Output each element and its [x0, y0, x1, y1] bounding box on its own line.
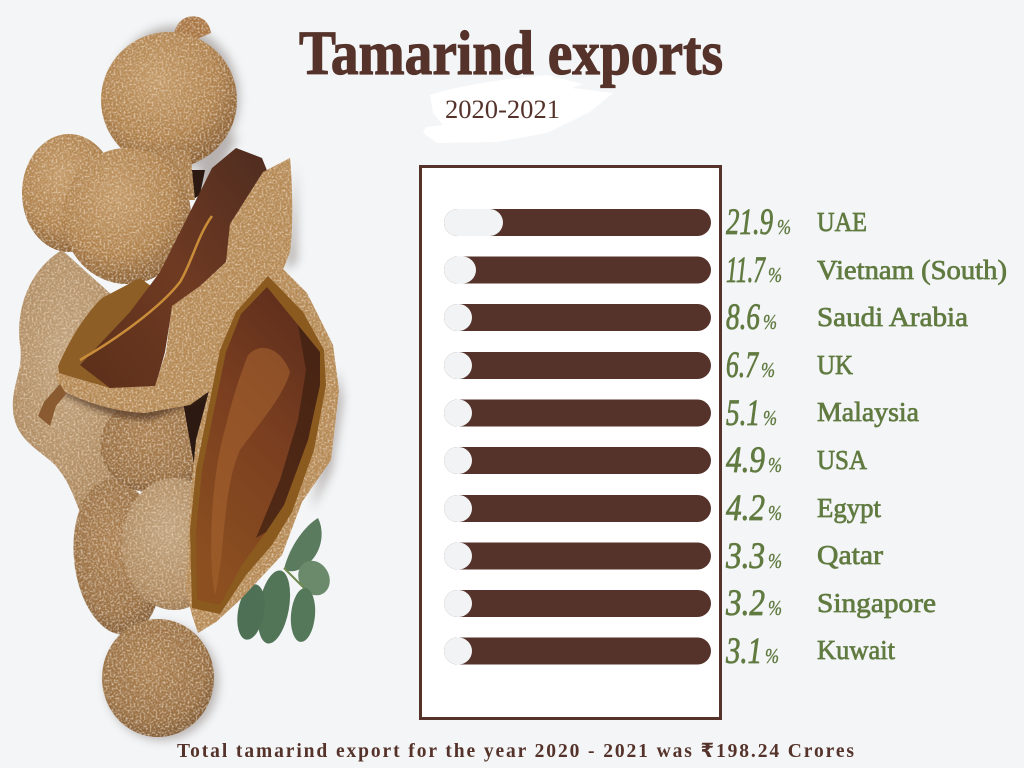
top pod with stem nub: [101, 16, 237, 168]
row: Singapore: %: [768, 596, 782, 620]
open pod with fruit, upper: [38, 148, 292, 426]
row: Egypt: Egypt: [817, 493, 881, 523]
hull shadow: [60, 380, 215, 420]
row: UK: %: [761, 358, 775, 382]
panel: bar chart: [420, 166, 1007, 718]
row: Egypt: [444, 488, 881, 529]
leaves: [233, 518, 336, 646]
row: Qatar: %: [768, 549, 782, 573]
open pod with fruit, lower: [186, 263, 339, 633]
inner hull: [58, 278, 170, 390]
brush stroke: [423, 75, 613, 143]
fruit flesh: [80, 148, 270, 392]
inner hull rim: [190, 276, 326, 614]
panel frame: [420, 166, 720, 718]
middle pod lobe: [100, 397, 210, 493]
grey left pod body: [13, 250, 135, 525]
row: Saudi Arabia: [444, 297, 968, 338]
pod stem: [38, 384, 66, 426]
row: UAE: %: [777, 215, 791, 239]
lower left pod lobe: [66, 475, 170, 639]
dark gap behind open pods: [180, 170, 225, 470]
outer hull: [55, 158, 292, 413]
second upper pod lobe: [63, 148, 195, 284]
tamarind photo illustration: [13, 16, 343, 740]
row: Vietnam (South): [444, 250, 1007, 291]
row: Saudi Arabia: %: [763, 310, 777, 334]
row: USA: %: [768, 453, 782, 477]
fruit flesh: [196, 287, 320, 605]
row: Singapore: [444, 583, 936, 624]
row: Malaysia: Malaysia: [817, 397, 919, 427]
row: Vietnam (South): %: [768, 263, 782, 287]
pale round pod lobe: [122, 478, 226, 610]
title: Tamarind exports: [299, 18, 723, 88]
row: Kuwait: 3.1: [725, 631, 762, 672]
row: Egypt: %: [768, 501, 782, 525]
row: UAE: 21.9: [726, 202, 773, 243]
row: UK: [444, 345, 853, 386]
row: Kuwait: [444, 631, 895, 672]
row: Singapore: 3.2: [725, 583, 765, 624]
row: UAE: UAE: [817, 207, 867, 237]
row: USA: USA: [817, 445, 867, 475]
row: Saudi Arabia: Saudi Arabia: [817, 302, 968, 332]
row: Malaysia: [444, 393, 919, 434]
row: Qatar: 3.3: [725, 536, 765, 577]
row: Qatar: [444, 536, 883, 577]
row: USA: 4.9: [726, 440, 765, 481]
subtitle with white brush stroke: [423, 75, 613, 143]
row: Malaysia: 5.1: [726, 393, 760, 434]
outer hull: [186, 263, 339, 633]
year range: 2020-2021: [445, 95, 560, 124]
row: UAE: [444, 202, 867, 243]
row: USA: [444, 440, 867, 481]
row: Malaysia: %: [763, 406, 777, 430]
row: Qatar: Qatar: [817, 540, 883, 570]
left back pod lobe: [22, 134, 116, 252]
row: UK: 6.7: [726, 345, 759, 386]
row: Singapore: Singapore: [817, 588, 936, 618]
footer note: Total tamarind export for the year 2020 - 2021 was ₹198.24 Crores: [177, 741, 854, 762]
row: Egypt: 4.2: [726, 488, 765, 529]
bottom round pod: [102, 619, 214, 737]
cast shadows: [106, 26, 343, 740]
row: UK: UK: [817, 350, 853, 380]
row: Vietnam (South): 11.7: [726, 250, 766, 291]
row: Kuwait: Kuwait: [817, 635, 895, 665]
row: Saudi Arabia: 8.6: [726, 297, 760, 338]
fruit fibre highlight: [80, 216, 212, 360]
dark fruit edge: [256, 325, 320, 538]
row: Kuwait: %: [765, 644, 779, 668]
row: Vietnam (South): Vietnam (South): [817, 255, 1007, 285]
fruit highlight: [211, 348, 290, 595]
